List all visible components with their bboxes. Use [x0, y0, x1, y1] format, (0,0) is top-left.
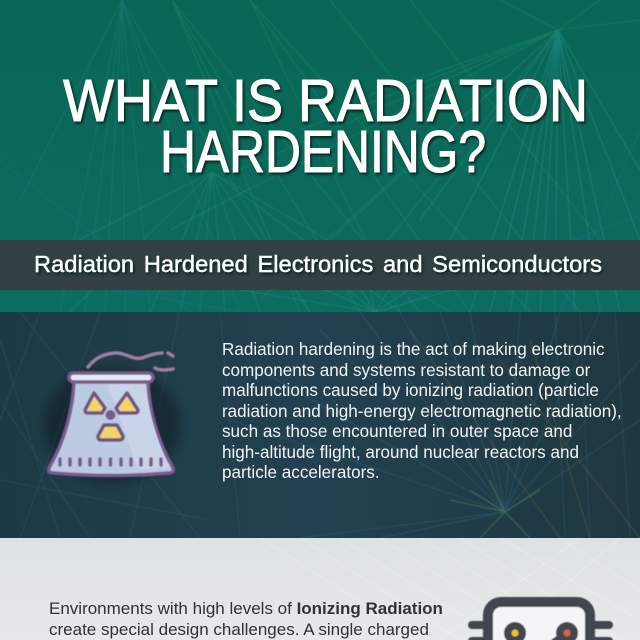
- title: WHAT IS RADIATION: [63, 68, 588, 134]
- intro paragraph: [222, 340, 622, 482]
- intro paragraph: malfunctions caused by ionizing radiation (particle: [222, 381, 599, 400]
- light rays over header: [0, 0, 640, 312]
- subtitle band: [0, 240, 640, 290]
- tower body: [49, 381, 173, 476]
- panel rays: [0, 312, 640, 538]
- chip nodes: [504, 622, 526, 640]
- light panel: [0, 538, 640, 640]
- tower lip: [69, 373, 153, 382]
- radiation symbol: [85, 393, 138, 440]
- intro paragraph: particle accelerators.: [222, 463, 380, 482]
- chip body: [488, 602, 590, 640]
- intro paragraph: radiation and high-energy electromagnetic radiation),: [222, 402, 622, 420]
- tower highlight: [108, 384, 170, 470]
- intro paragraph: such as those encountered in outer space and: [222, 422, 572, 441]
- environments paragraph: create special design challenges. A single charged: [49, 620, 429, 639]
- title: [63, 68, 588, 185]
- smoke: [88, 353, 173, 370]
- icon: nuclear cooling tower: [44, 353, 180, 483]
- intro paragraph: components and systems resistant to damage or: [222, 360, 590, 380]
- light panel texture: [260, 538, 640, 640]
- vents: [60, 459, 161, 465]
- environments paragraph: [49, 599, 443, 639]
- radiation centre: [106, 410, 116, 420]
- icon: microchip: [472, 602, 609, 640]
- intro paragraph: high-altitude flight, around nuclear reactors and: [222, 442, 579, 462]
- intro paragraph: Radiation hardening is the act of making electronic: [222, 340, 605, 359]
- dark panel: [0, 312, 640, 538]
- title: HARDENING?: [160, 119, 486, 185]
- chip pins: [472, 625, 609, 640]
- background: green header: [0, 0, 640, 312]
- environments paragraph: Environments with high levels of Ionizing Radiation: [49, 599, 443, 618]
- subtitle: Radiation Hardened Electronics and Semiconductors: [34, 251, 602, 277]
